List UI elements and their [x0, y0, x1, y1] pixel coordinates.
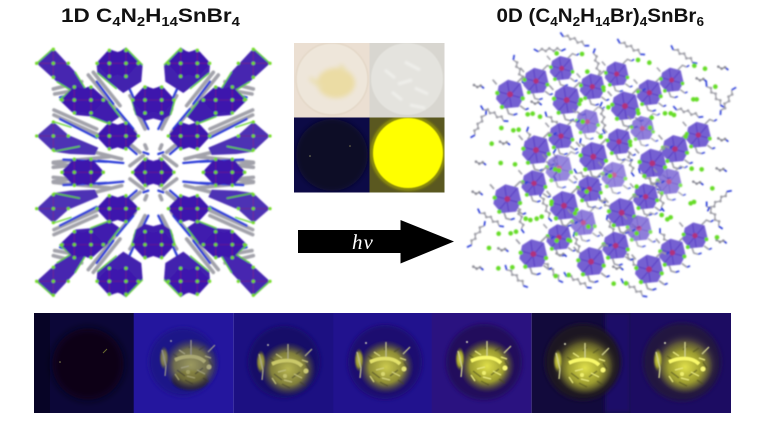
photo: 0D sample in daylight	[370, 43, 444, 118]
photo: 1D sample in daylight	[294, 43, 370, 118]
title: 0D compound: 6	[696, 14, 704, 29]
title: 1D compound: H	[145, 6, 161, 27]
frame 2: faint emission	[134, 313, 234, 413]
crystal structure: 1D chains	[35, 48, 272, 297]
organic cations	[467, 32, 736, 298]
frame 7: sustained emission	[630, 313, 732, 413]
photo grid: samples under daylight and UV	[294, 43, 446, 194]
title: 1D compound: 1D C	[61, 6, 112, 27]
photo strip: emission time series	[34, 313, 732, 413]
bromide ions	[487, 51, 719, 286]
title: 0D compound: H	[580, 6, 595, 27]
photo: 1D sample under UV	[294, 118, 370, 194]
title: 1D compound: 2	[137, 15, 145, 29]
title: 0D compound: Br)	[610, 6, 640, 27]
photo: 0D sample glowing yellow under UV	[370, 115, 446, 194]
label: hv: hv	[352, 230, 374, 254]
frame 1: dark	[34, 313, 134, 413]
title: 0D compound: SnBr	[647, 6, 697, 27]
title: 1D compound: N	[121, 6, 137, 27]
crystal structure: 0D isolated octahedra	[467, 32, 736, 298]
title: 1D compound: 14	[161, 15, 178, 29]
title: 1D compound: 4	[112, 15, 121, 29]
frame 6: strongest emission	[532, 313, 631, 413]
title: 0D compound: N	[558, 6, 573, 27]
frame 4: brighter emission	[333, 313, 432, 413]
frame 3: brighter emission	[234, 313, 334, 413]
frame 5: strong emission	[432, 313, 532, 413]
octahedra	[490, 54, 717, 290]
title: 0D compound: 4	[550, 14, 559, 29]
title: 1D compound: SnBr	[178, 6, 232, 27]
arrow: hv light irradiation	[298, 220, 454, 264]
title: 1D compound: 4	[232, 15, 240, 29]
title: 0D compound: 0D (C	[496, 6, 550, 27]
title: 0D compound: 14	[595, 14, 611, 29]
title: 0D compound: 4	[640, 14, 648, 29]
title: 0D compound: 2	[573, 14, 580, 29]
